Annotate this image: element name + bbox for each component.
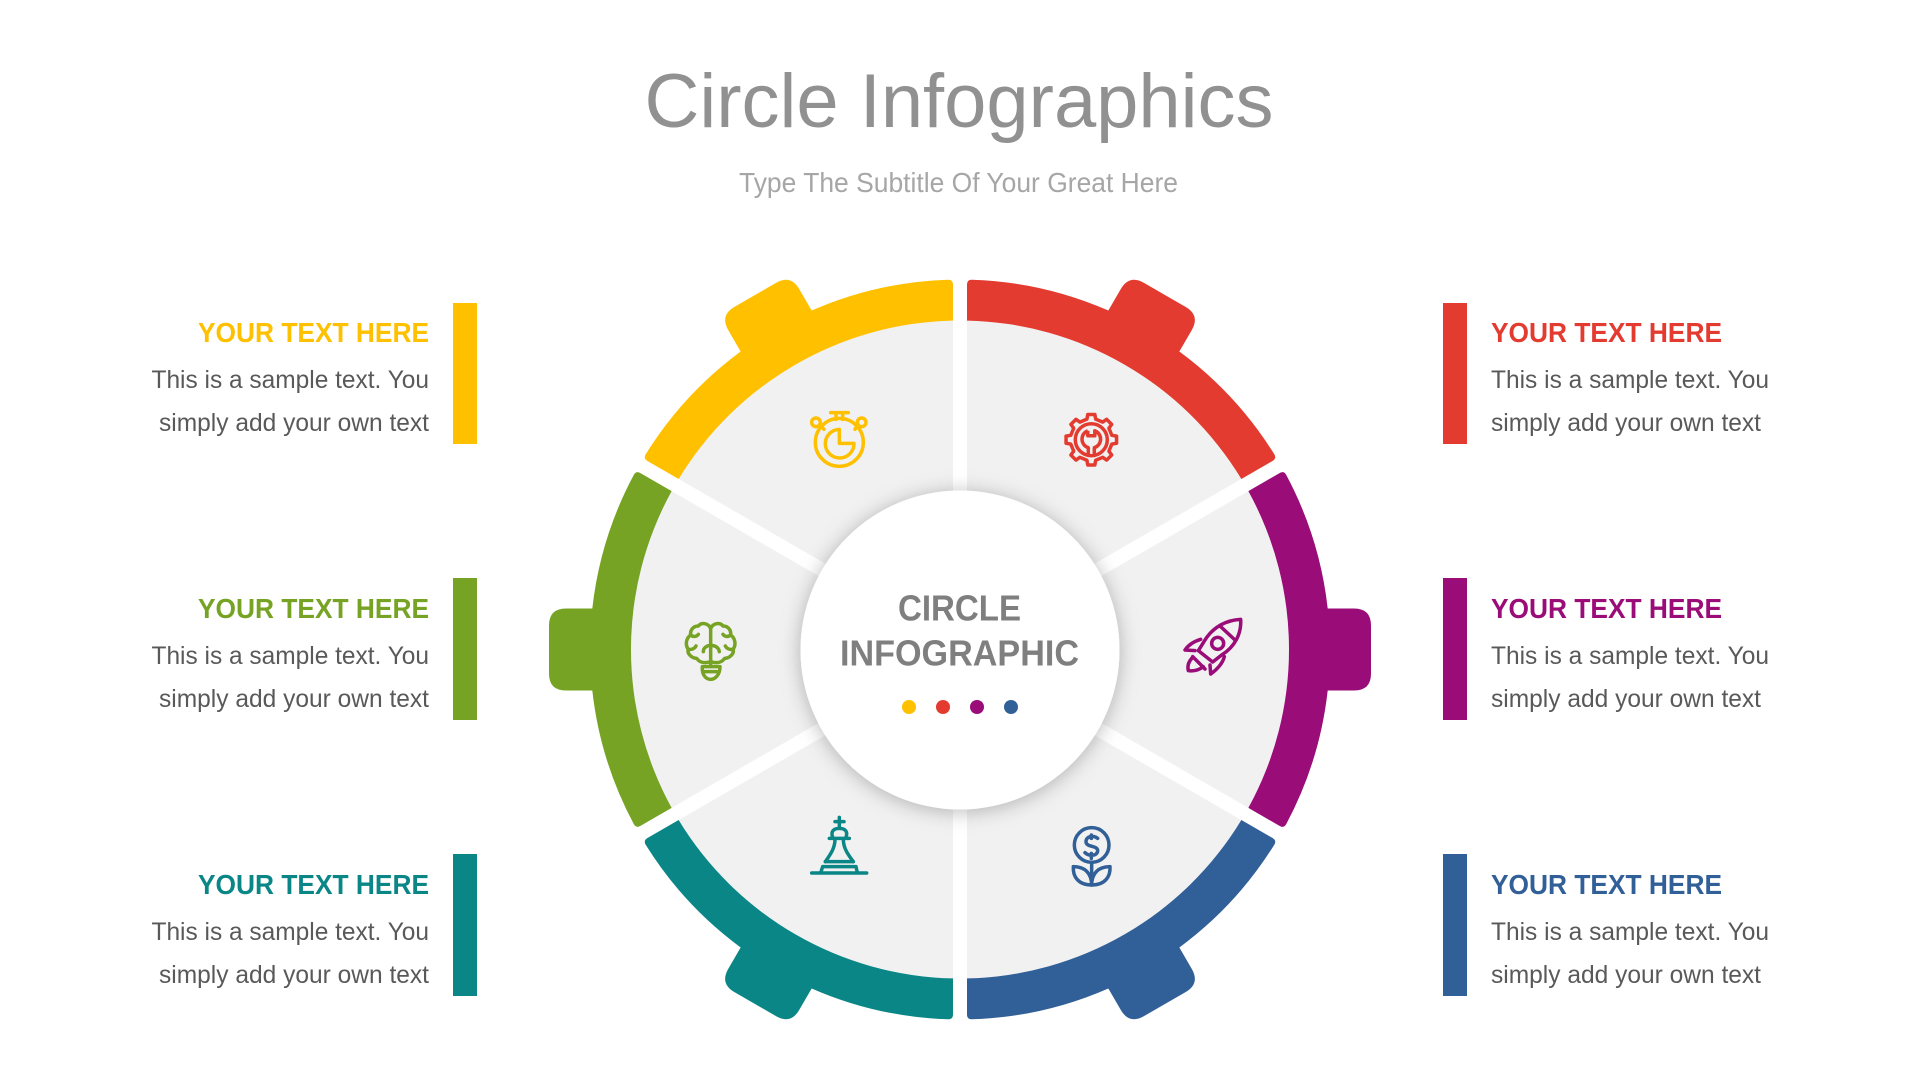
ring segment: green (549, 472, 672, 827)
body text: simply add your own text (1491, 409, 1761, 437)
icon: chess king (812, 817, 867, 873)
panel: left green item (152, 578, 477, 720)
icon: gear with wrench (1066, 414, 1117, 465)
heading: YOUR TEXT HERE (1491, 869, 1722, 900)
heading: YOUR TEXT HERE (198, 869, 429, 900)
body text: simply add your own text (159, 961, 429, 989)
grey sector: purple (1050, 491, 1289, 808)
accent bar (1443, 854, 1467, 996)
icon: money plant (1073, 828, 1110, 885)
body text: simply add your own text (159, 409, 429, 437)
body text (1491, 642, 1769, 713)
body text: This is a sample text. You (152, 918, 429, 946)
heading: YOUR TEXT HERE (198, 593, 429, 624)
accent bar (453, 578, 477, 720)
grey sector: blue (868, 648, 1262, 1014)
ring segment: red (951, 206, 1318, 488)
title: Circle Infographics (644, 59, 1274, 144)
centre heading (840, 588, 1079, 674)
grey sector: red (868, 285, 1262, 651)
body text: simply add your own text (1491, 961, 1761, 989)
panel: right purple item (1443, 578, 1769, 720)
body text (152, 918, 429, 989)
panel: circle diagram (549, 206, 1371, 1080)
grey sector: green (631, 491, 870, 808)
subtitle: Type The Subtitle Of Your Great Here (739, 167, 1178, 198)
panel: right red item (1443, 303, 1769, 444)
grey sector: yellow (658, 285, 1052, 651)
body text (1491, 918, 1769, 989)
body text: This is a sample text. You (1491, 918, 1769, 946)
heading: YOUR TEXT HERE (1491, 593, 1722, 624)
icon: brain bulb (686, 624, 735, 679)
heading: YOUR TEXT HERE (1491, 317, 1722, 348)
ring segment: yellow (602, 206, 969, 488)
body text (152, 642, 429, 713)
ring segment: purple (1248, 472, 1371, 827)
centre heading: CIRCLE (898, 588, 1021, 628)
body text (1491, 366, 1769, 437)
heading: YOUR TEXT HERE (198, 317, 429, 348)
accent bar (453, 303, 477, 444)
body text: simply add your own text (159, 685, 429, 713)
panel: left teal item (152, 854, 477, 996)
accent bar (453, 854, 477, 996)
icon: rocket (1185, 619, 1241, 674)
body text (152, 366, 429, 437)
ring segment: blue (951, 811, 1318, 1080)
body text: This is a sample text. You (152, 366, 429, 394)
body text: This is a sample text. You (1491, 642, 1769, 670)
body text: This is a sample text. You (1491, 366, 1769, 394)
centre colour dots (902, 700, 1018, 714)
grey sector: teal (658, 648, 1052, 1014)
ring segment: teal (602, 811, 969, 1080)
icon: stopwatch (812, 413, 866, 466)
accent bar (1443, 303, 1467, 444)
accent bar (1443, 578, 1467, 720)
panel: left yellow item (152, 303, 477, 444)
centre heading: INFOGRAPHIC (840, 632, 1079, 674)
body text: This is a sample text. You (152, 642, 429, 670)
body text: simply add your own text (1491, 685, 1761, 713)
centre circle (800, 490, 1120, 810)
panel: right blue item (1443, 854, 1769, 996)
